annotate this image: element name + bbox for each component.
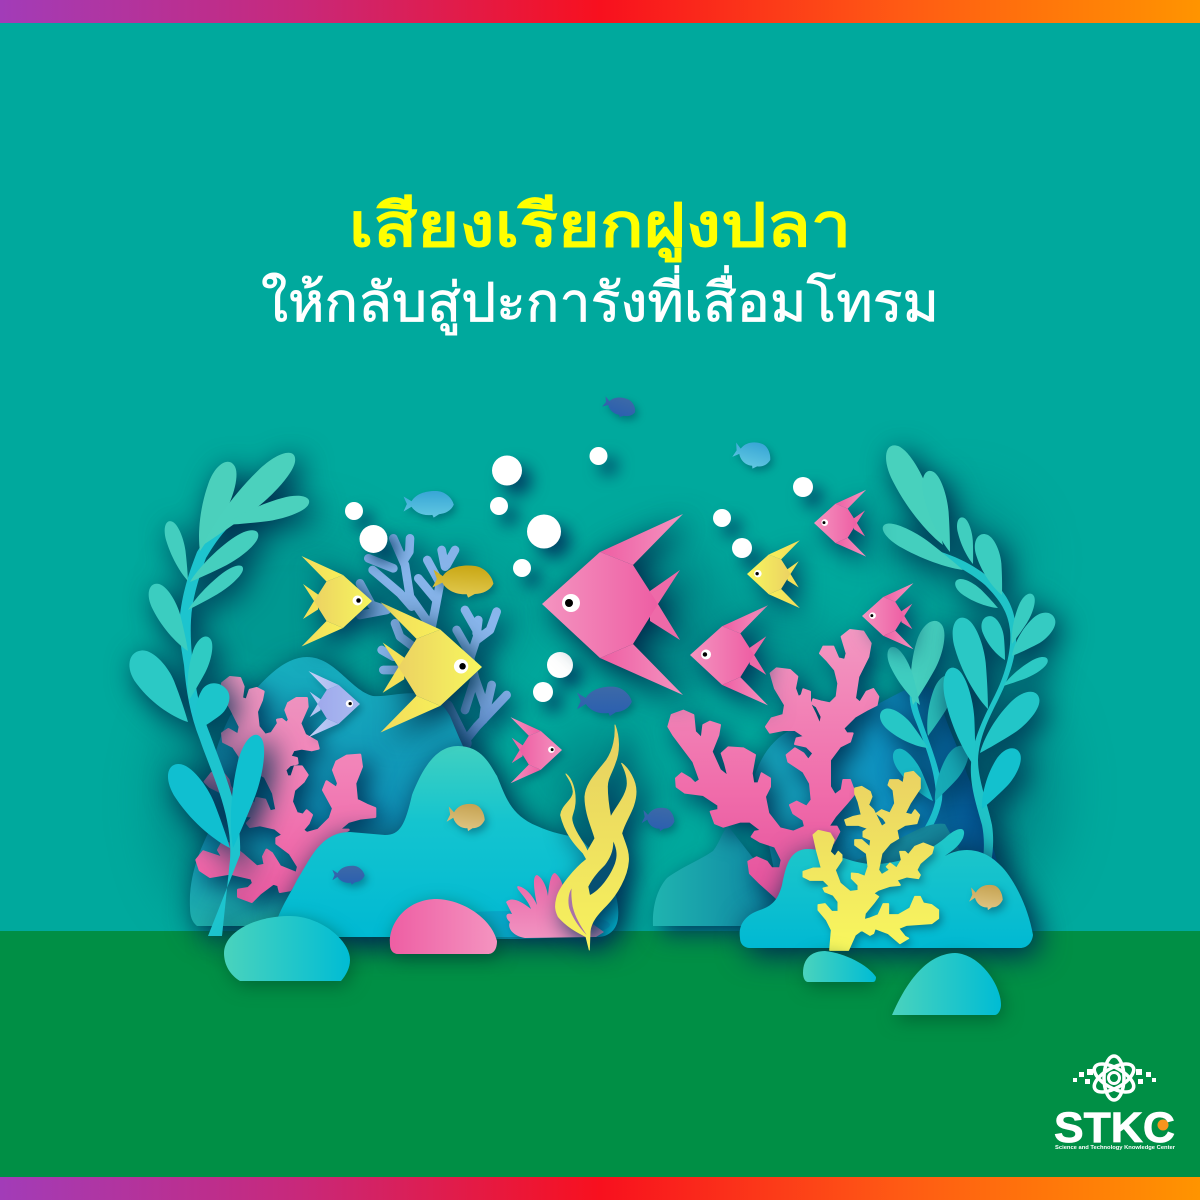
fish: sky blue tang	[404, 491, 454, 518]
bright-blue shade under rocks	[410, 911, 610, 939]
right back blue rock	[755, 686, 998, 900]
fish: small pink, right	[862, 583, 913, 649]
fish: navy tang right of kelp	[641, 805, 676, 833]
logo icon: pixel dots	[1073, 1069, 1156, 1084]
fish: large pink	[542, 514, 683, 695]
right back teal rock	[653, 826, 790, 926]
bubbles	[345, 447, 813, 702]
fish: medium pink	[690, 605, 768, 705]
yellow coral	[803, 772, 938, 950]
fish: small pink, upper right	[814, 490, 866, 557]
pink coral, left	[197, 677, 375, 902]
pink rock	[390, 899, 497, 954]
yellow kelp	[556, 725, 636, 950]
front teal rock, left	[273, 746, 618, 937]
blue branching coral	[360, 538, 507, 743]
top gradient bar	[0, 0, 1200, 23]
STKC logo	[1054, 1056, 1176, 1152]
logo orange dot	[1158, 1120, 1168, 1130]
fish: tan tang right rock	[968, 882, 1005, 912]
bottom gradient bar	[0, 1177, 1200, 1200]
pink coral, right	[668, 630, 878, 900]
translucent back hump, right	[850, 824, 965, 885]
fish: small yellow, right	[747, 540, 800, 608]
soft dark water glow behind the reef	[160, 490, 1060, 910]
right seaweed, small	[875, 617, 974, 862]
fish: navy tang on rock	[332, 866, 365, 885]
blue back rock, left	[190, 657, 480, 926]
fish: tan tang on rock	[446, 801, 487, 833]
fish: navy tang top	[601, 392, 638, 421]
logo icon: atom	[1090, 1056, 1138, 1100]
teal rock, front left	[224, 916, 350, 981]
logo tagline: Science and Technology Knowledge Center	[1055, 1145, 1176, 1151]
small teal rock, front right	[803, 951, 876, 982]
fish: navy tang centre	[577, 687, 632, 716]
small pink fan coral	[506, 873, 604, 938]
fish: lavender	[309, 671, 360, 737]
title line 2: ให้กลับสู่ปะการังที่เสื่อมโทรม	[261, 273, 939, 333]
large teal rock, front right	[892, 953, 1001, 1015]
fish: gold tang	[432, 563, 495, 599]
front teal rock, right	[740, 829, 1033, 948]
green sea floor	[0, 931, 1200, 1177]
fish: large yellow	[380, 602, 482, 733]
fish: sky tang top right	[731, 437, 774, 473]
fish: medium yellow	[302, 556, 372, 646]
title	[261, 192, 939, 336]
right seaweed, large	[878, 440, 1061, 885]
logo wordmark: STKC	[1054, 1104, 1175, 1152]
fish: small pink, centre	[511, 717, 562, 783]
title line 1: เสียงเรียกฝูงปลา	[349, 192, 851, 259]
left seaweed	[121, 445, 312, 936]
